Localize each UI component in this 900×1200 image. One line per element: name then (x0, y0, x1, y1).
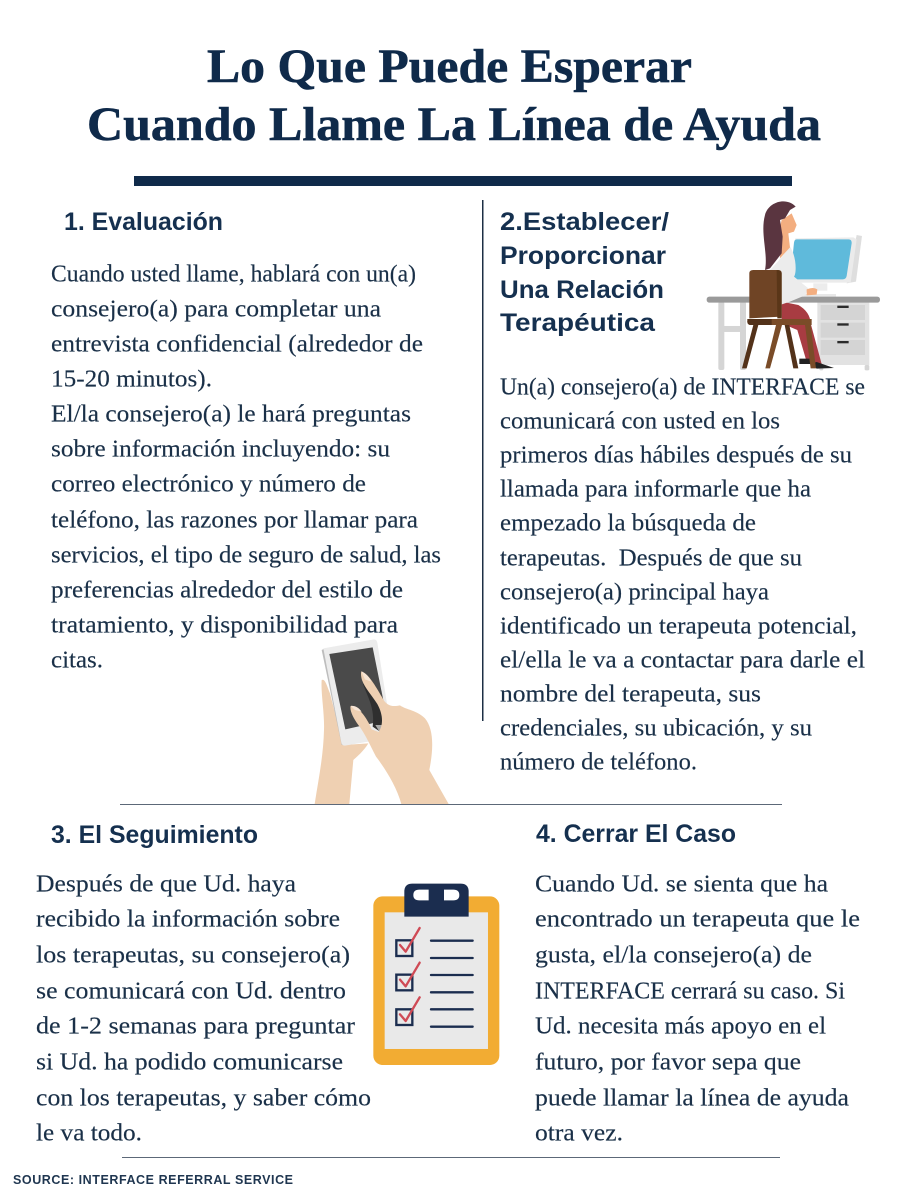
text block: Evaluación body: 15-20 minutos). (51, 366, 212, 392)
text block: Cerrar body: Ud. necesita más apoyo en el (535, 1014, 826, 1040)
text block: Relación body: comunicará con usted en los (500, 408, 780, 434)
title (87, 40, 821, 151)
panel: 2. Establecer / Proporcionar Una Relación Terapéutica (500, 201, 880, 776)
text block: Relación body: identificado un terapeuta potencial, (500, 614, 857, 640)
text block: Seguimiento body: Después de que Ud. haya (36, 872, 296, 898)
source line: SOURCE: INTERFACE REFERRAL SERVICE (13, 1173, 293, 1187)
heading: Establecer: 2.Establecer/ (500, 208, 669, 236)
text block: Cerrar body: otra vez. (535, 1120, 623, 1146)
text block: Evaluación body: correo electrónico y número de (51, 472, 366, 498)
title: Lo Que Puede Esperar (207, 40, 692, 93)
text block: Relación body: empezado la búsqueda de (500, 510, 756, 536)
text block: Relación body: el/ella le va a contactar para darle el (500, 648, 865, 674)
heading: Evaluación: 1. Evaluación (64, 208, 223, 236)
text block: Relación body: llamada para informarle que ha (500, 476, 811, 502)
text block: Seguimiento body (36, 872, 371, 1146)
icon: clipboard checklist (373, 884, 499, 1065)
panel: 1. Evaluación (51, 208, 449, 804)
text block: Relación body: nombre del terapeuta, sus (500, 682, 761, 708)
text block: Evaluación body: El/la consejero(a) le hará preguntas (51, 402, 411, 428)
icon: hands holding phone (315, 639, 449, 804)
text block: Relación body: primeros días hábiles después de su (500, 442, 852, 468)
text block: Evaluación body: citas. (51, 648, 103, 674)
text block: Seguimiento body: se comunicará con Ud. dentro (36, 978, 346, 1004)
text block: Seguimiento body: le va todo. (36, 1120, 142, 1146)
heading: Establecer (500, 208, 669, 337)
title: Cuando Llame La Línea de Ayuda (87, 98, 821, 151)
text block: Seguimiento body: recibido la información sobre (36, 906, 340, 932)
icon: woman at desk (707, 201, 880, 370)
text block: Evaluación body: entrevista confidencial (alrededor de (51, 332, 423, 358)
heading: Seguimiento: 3. El Seguimiento (51, 821, 258, 849)
panel: 3. El Seguimiento (36, 821, 499, 1146)
text block: Evaluación body: consejero(a) para completar una (51, 296, 381, 322)
text block: Seguimiento body: de 1-2 semanas para preguntar (36, 1014, 355, 1040)
text block: Cerrar body: futuro, por favor sepa que (535, 1050, 801, 1076)
heading: Establecer: Una Relación (500, 276, 664, 304)
heading: Establecer: Terapéutica (500, 309, 656, 337)
text block: Cerrar body: encontrado un terapeuta que le (535, 906, 860, 932)
text block: Evaluación body: Cuando usted llame, hablará con un(a) (51, 262, 416, 288)
text block: Evaluación body: servicios, el tipo de seguro de salud, las (51, 542, 441, 568)
text block: Evaluación body: sobre información incluyendo: su (51, 436, 390, 462)
text block: Relación body: terapeutas. Después de que su (500, 546, 802, 572)
heading: Establecer: Proporcionar (500, 242, 666, 270)
text block: Evaluación body: tratamiento, y disponibilidad para (51, 612, 398, 638)
text block: Relación body: número de teléfono. (500, 750, 697, 776)
heading: Cerrar El Caso: 4. Cerrar El Caso (536, 820, 736, 848)
text block: Cerrar body (535, 872, 860, 1146)
text block: Relación body: consejero(a) principal haya (500, 580, 769, 606)
panel: 4. Cerrar El Caso (535, 820, 860, 1146)
text block: Cerrar body: puede llamar la línea de ayuda (535, 1086, 849, 1112)
text block: Seguimiento body: si Ud. ha podido comunicarse (36, 1050, 343, 1076)
text block: Evaluación body: teléfono, las razones por llamar para (51, 508, 418, 534)
text block: Relación body: Un(a) consejero(a) de INTERFACE se (500, 374, 865, 400)
text block: Evaluación body: preferencias alrededor del estilo de (51, 578, 403, 604)
text block: Evaluación body (51, 262, 441, 674)
text block: Relación body (500, 374, 865, 776)
text block: Seguimiento body: los terapeutas, su consejero(a) (36, 942, 350, 968)
text block: Seguimiento body: con los terapeutas, y saber cómo (36, 1086, 371, 1112)
text block: Cerrar body: INTERFACE cerrará su caso. Si (535, 978, 845, 1004)
text block: Cerrar body: Cuando Ud. se sienta que ha (535, 872, 828, 898)
text block: Cerrar body: gusta, el/la consejero(a) de (535, 942, 812, 968)
text block: Relación body: credenciales, su ubicación, y su (500, 716, 812, 742)
